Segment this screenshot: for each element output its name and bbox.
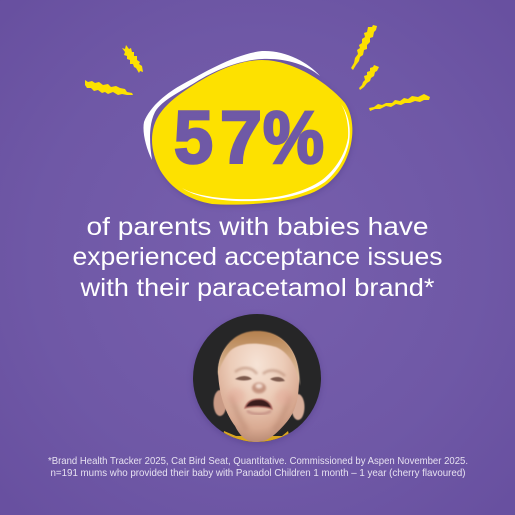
ears [214, 390, 226, 416]
lower lip [247, 411, 271, 414]
hair [218, 331, 300, 386]
cheek blush [230, 388, 244, 402]
footnote line 1: *Brand Health Tracker 2025, Cat Bird Seat, Quantitative. Commissioned by Aspen November 2025. [48, 455, 468, 467]
main statement [72, 213, 443, 302]
mouth [245, 399, 272, 409]
white outline bottom [182, 104, 350, 201]
bolt: small right [359, 65, 379, 90]
burst lines [85, 25, 430, 111]
footnote [48, 455, 468, 479]
line 2: experienced acceptance issues [72, 243, 443, 271]
yellow blob with white scribble [143, 51, 353, 207]
yellow shape [152, 60, 352, 205]
bolt: lower right [369, 94, 430, 111]
figure: 57%: 7 [220, 96, 262, 179]
brow furrows [235, 368, 285, 376]
figure: 57% [174, 96, 324, 179]
line 1: of parents with babies have [86, 213, 428, 241]
footnote line 2: n=191 mums who provided their baby with Panadol Children 1 month – 1 year (cherry flavoured) [50, 467, 466, 479]
bolt: left [85, 80, 133, 95]
cheek shading [231, 396, 290, 430]
nose [252, 382, 266, 394]
bolt: upper left [122, 45, 143, 73]
eyes [235, 376, 285, 382]
bolt: top right [351, 25, 377, 70]
crying baby portrait [192, 314, 322, 446]
blob shadow [153, 62, 353, 207]
line 3: with their paracetamol brand* [79, 274, 435, 302]
figure: 57%: % [263, 96, 324, 179]
figure: 57%: 5 [174, 96, 213, 179]
shirt [224, 431, 289, 442]
head [218, 332, 299, 442]
white outline top [143, 51, 320, 160]
